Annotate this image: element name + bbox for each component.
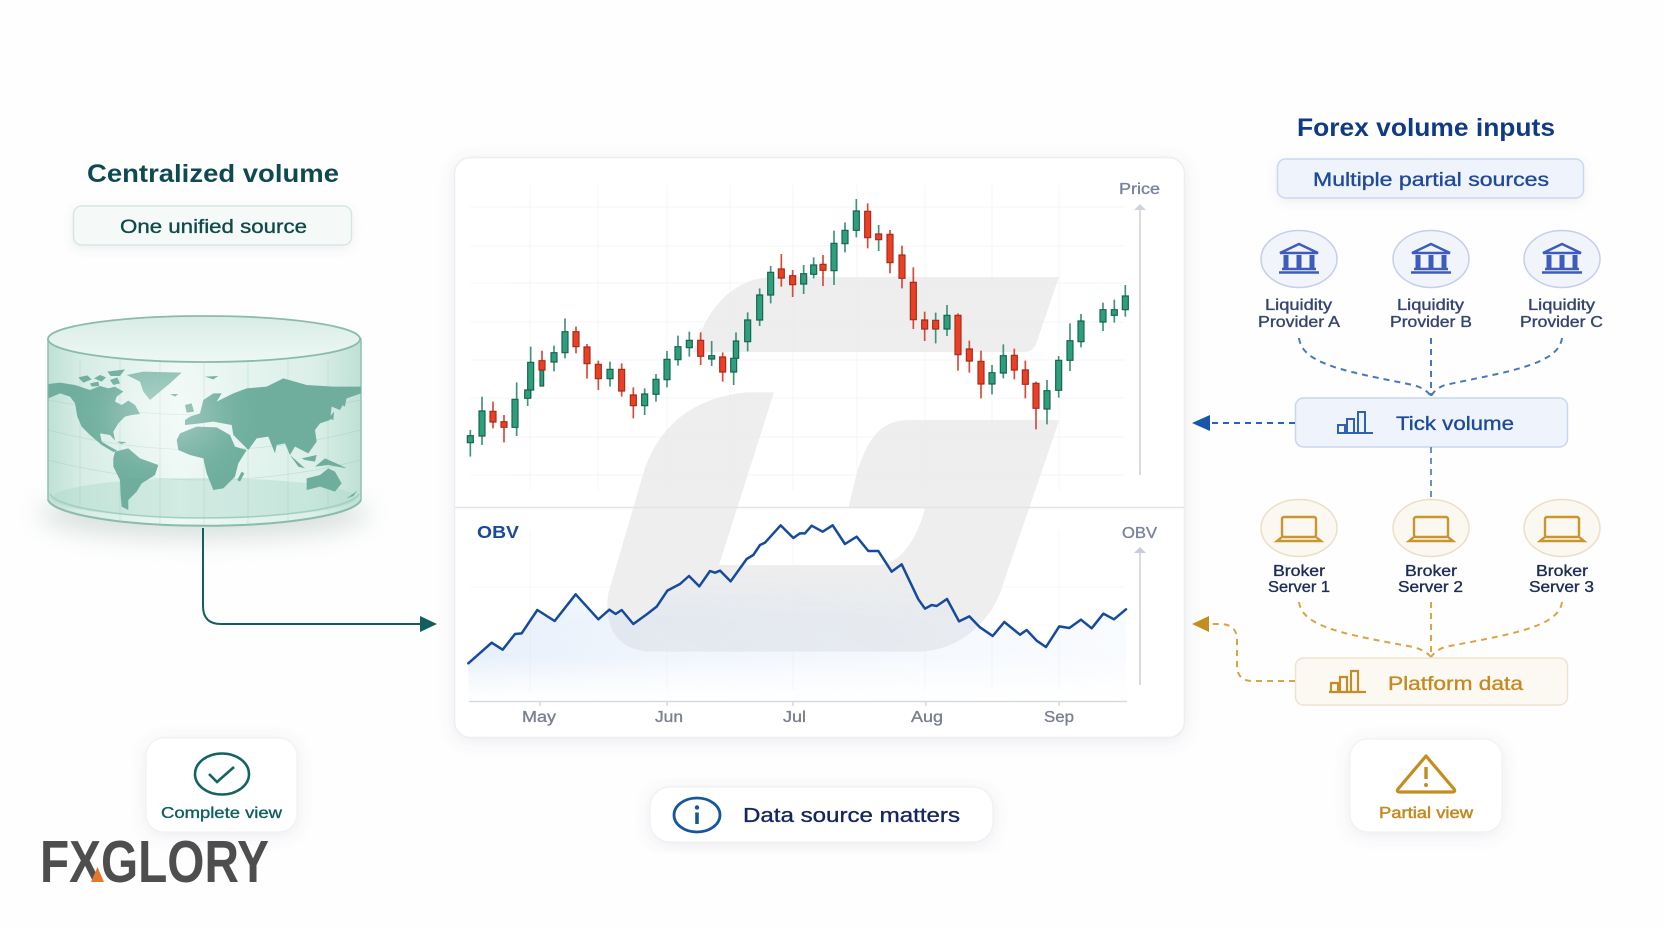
node: broker server 2 bbox=[1393, 500, 1469, 596]
watermark logo bbox=[607, 277, 1059, 652]
time axis bbox=[469, 701, 1127, 726]
node: broker server 3 bbox=[1524, 500, 1600, 596]
node: broker server 3: Broker bbox=[1536, 563, 1588, 580]
arrows: providers to tick volume bbox=[1299, 338, 1562, 396]
box: platform data bbox=[1296, 658, 1568, 705]
OBV axis: OBV bbox=[1122, 525, 1158, 542]
box: platform data: Platform data bbox=[1388, 673, 1523, 695]
node: liquidity provider B: Provider B bbox=[1390, 314, 1472, 331]
badge: partial view: Partial view bbox=[1379, 805, 1474, 822]
OBV line chart bbox=[468, 525, 1126, 700]
panel divider bbox=[455, 506, 1184, 508]
callout: data source matters: Data source matters bbox=[743, 805, 960, 827]
panel: centralized volume bbox=[39, 160, 437, 832]
node: broker server 3: Server 3 bbox=[1529, 579, 1594, 596]
node: liquidity provider C: Liquidity bbox=[1528, 297, 1595, 314]
pill: multiple partial sources bbox=[1278, 159, 1584, 198]
time axis: Jul bbox=[783, 709, 806, 726]
badge: complete view: Complete view bbox=[161, 805, 283, 822]
badge: partial view bbox=[1350, 739, 1502, 832]
logo: FXGLORY: FXGLORY bbox=[40, 829, 269, 895]
icon: glass cylinder with world map bbox=[39, 316, 369, 538]
node: broker server 2: Server 2 bbox=[1398, 579, 1463, 596]
OBV axis bbox=[1122, 525, 1158, 685]
node: broker server 1 bbox=[1261, 500, 1337, 596]
price axis: Price bbox=[1119, 181, 1160, 198]
callout: data source matters bbox=[650, 787, 993, 842]
heading: forex volume inputs: Forex volume inputs bbox=[1297, 114, 1555, 142]
node: liquidity provider B bbox=[1390, 230, 1472, 331]
node: liquidity provider A: Provider A bbox=[1258, 314, 1341, 331]
badge: complete view bbox=[146, 738, 297, 832]
node: broker server 1: Server 1 bbox=[1268, 579, 1330, 596]
world map bbox=[48, 369, 361, 510]
time axis: May bbox=[522, 709, 556, 726]
node: broker server 1: Broker bbox=[1273, 563, 1325, 580]
node: liquidity provider C bbox=[1520, 230, 1603, 331]
label: OBV: OBV bbox=[477, 522, 519, 542]
arrow: platform data to chart bbox=[1192, 616, 1295, 681]
price axis bbox=[1119, 181, 1160, 475]
node: liquidity provider A bbox=[1258, 230, 1341, 331]
connector: tick volume to broker servers bbox=[1430, 447, 1432, 499]
pill: one unified source bbox=[74, 206, 352, 245]
pill: one unified source: One unified source bbox=[120, 217, 307, 238]
node: liquidity provider C: Provider C bbox=[1520, 314, 1603, 331]
pill: multiple partial sources: Multiple partial sources bbox=[1313, 170, 1549, 191]
box: tick volume: Tick volume bbox=[1396, 413, 1514, 435]
panel: price and OBV chart bbox=[454, 158, 1184, 738]
arrow: tick volume to chart bbox=[1192, 415, 1295, 431]
heading: centralized volume: Centralized volume bbox=[87, 160, 339, 188]
node: liquidity provider A: Liquidity bbox=[1265, 297, 1332, 314]
node: liquidity provider B: Liquidity bbox=[1397, 297, 1464, 314]
box: tick volume bbox=[1296, 398, 1568, 447]
candlestick chart bbox=[467, 199, 1128, 457]
time axis: Jun bbox=[655, 709, 683, 726]
panel: forex volume inputs bbox=[1192, 114, 1603, 832]
infographic canvas bbox=[39, 118, 1602, 882]
arrow: cylinder to chart bbox=[203, 528, 437, 632]
time axis: Sep bbox=[1044, 709, 1074, 726]
node: broker server 2: Broker bbox=[1405, 563, 1457, 580]
arrows: broker servers to platform data bbox=[1299, 602, 1562, 657]
time axis: Aug bbox=[911, 709, 943, 726]
